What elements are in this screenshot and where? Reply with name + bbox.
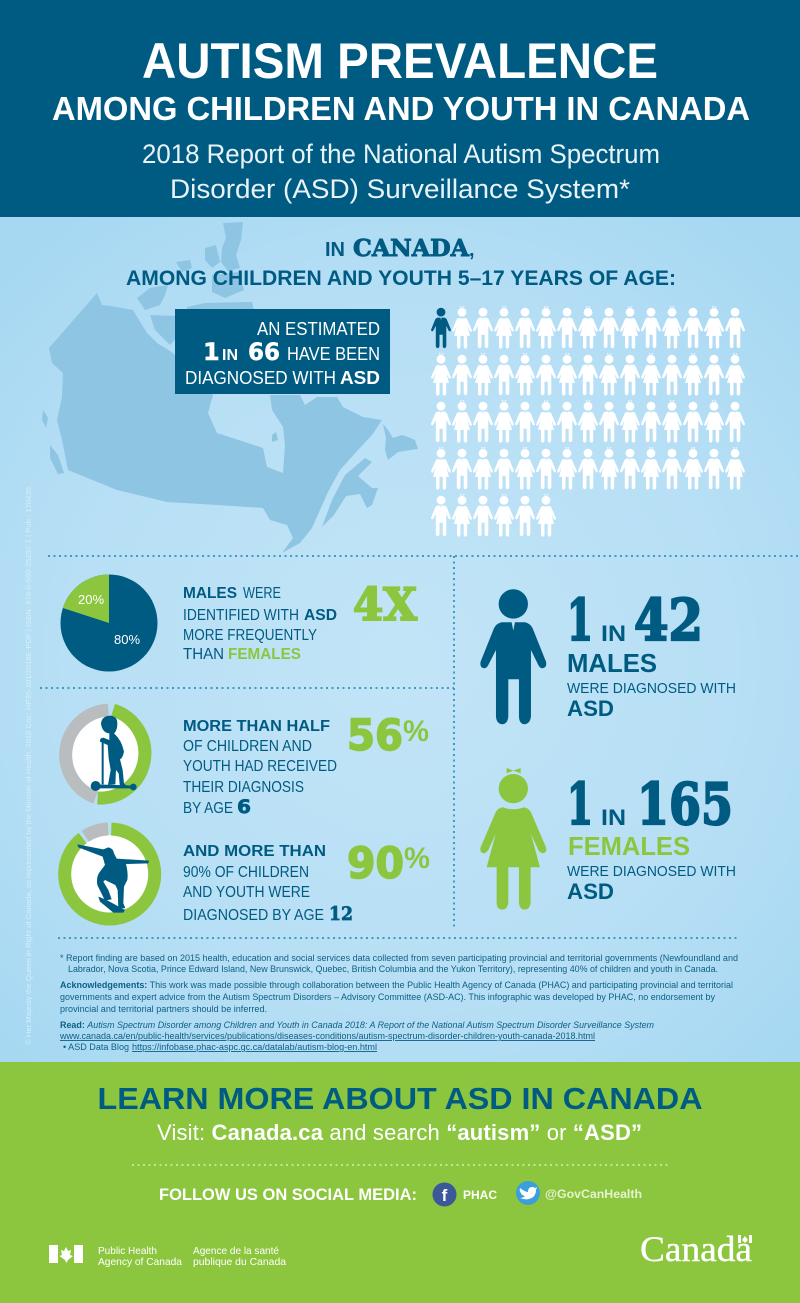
PHAC label: PHAC [463, 1188, 497, 1202]
twitter handle: @GovCanHealth [545, 1189, 642, 1201]
stat: 1 in 165 females: FEMALES [568, 831, 690, 861]
report line 2: Disorder (ASD) Surveillance System* [170, 174, 630, 204]
pie chart: 80% / 20%: 20% [78, 592, 104, 607]
heading line 2: AMONG CHILDREN AND YOUTH 5–17 YEARS OF AGE: [126, 267, 676, 290]
footnotes: Read: Autism Spectrum Disorder among Children and Youth in Canada 2018: A Report of the National Autism Spectrum Disorder Surveillance System [60, 1020, 654, 1030]
stat: 1 in 42 males: 1 [567, 587, 593, 654]
stat: 1 in 165 females: ASD [567, 879, 614, 904]
heading: in Canada: IN [325, 239, 345, 261]
header band [0, 0, 800, 217]
text: males identified 4x: WERE [243, 585, 281, 602]
donut: 56% with scooter child [66, 710, 150, 798]
footnotes [59, 953, 738, 1052]
footnotes: • ASD Data Blog [63, 1042, 129, 1052]
donut: 90% with skateboarder [65, 829, 155, 919]
stat: 1 in 42 males [567, 587, 736, 721]
text: males identified 4x: MALES [183, 585, 237, 602]
callout: 1 in 66: AN ESTIMATED [257, 319, 380, 339]
footnotes: https://infobase.phac-aspc.gc.ca/datalab/autism-blog-en.html [132, 1042, 377, 1052]
title: AUTISM PREVALENCE [142, 33, 658, 89]
icon: facebook [432, 1182, 456, 1206]
icon: male figure [480, 589, 546, 724]
callout: 1 in 66 [175, 309, 390, 394]
icon: female figure [480, 768, 546, 910]
text: more than 90%: 12 [329, 903, 353, 925]
icon: skateboarder [77, 844, 149, 913]
icon: twitter [516, 1181, 540, 1205]
callout: 1 in 66: ASD [340, 368, 380, 388]
text: more than 90%: AND MORE THAN [183, 843, 326, 860]
subtitle: AMONG CHILDREN AND YOUTH IN CANADA [52, 90, 750, 127]
callout: 1 in 66: 66 [248, 338, 280, 366]
callout: 1 in 66: IN [222, 347, 238, 364]
stat: 1 in 42 males: IN [601, 621, 626, 646]
stat: 1 in 165 females: WERE DIAGNOSED WITH [567, 863, 736, 880]
text: males identified 4x [183, 585, 337, 663]
stat: 90%: 90 [347, 839, 404, 889]
icon: facebook: f [442, 1186, 448, 1205]
text: more than half: YOUTH HAD RECEIVED [183, 758, 337, 775]
footnotes: provincial and territorial partners should be inferred. [60, 1004, 267, 1014]
text: males identified 4x: IDENTIFIED WITH [183, 607, 299, 624]
heading: in Canada [126, 235, 676, 290]
vertical copyright: © Her Majesty the Queen in Right of Canada, as represented by the Minister of Health, 2018 Cat.: HP35-101/2018E-PDF | ISBN: 978-0-660-25297-1 | Pub.: 170435 [24, 487, 33, 1045]
footnotes: www.canada.ca/en/public-health/services/publications/diseases-conditions/autism-spectrum-disorder-children-youth-canada-2018.html [59, 1031, 595, 1041]
stat: 1 in 165 females: 1 [567, 771, 593, 838]
footnotes: governments and expert advice from the Autism Spectrum Disorders – Advisory Committee (ASD-AC). This infographic was developed by PHAC, no endorsement by [60, 992, 715, 1002]
text: more than half: OF CHILDREN AND [183, 738, 312, 755]
text: more than 90%: 90% OF CHILDREN [183, 864, 309, 881]
map of Canada [42, 222, 418, 553]
footnotes: * Report finding are based on 2015 health, education and social services data collected from seven participating provincial and territorial governments (Newfoundland and [60, 953, 738, 963]
footer heading: LEARN MORE ABOUT ASD IN CANADA [98, 1081, 703, 1116]
text: more than half: 6 [237, 796, 251, 818]
footer panel [0, 1062, 800, 1303]
social label: FOLLOW US ON SOCIAL MEDIA: [159, 1185, 417, 1204]
stat: 1 in 42 males: WERE DIAGNOSED WITH [567, 680, 736, 697]
logo: Public Health Agency of Canada: Agence de la santé [193, 1245, 279, 1257]
logo: Public Health Agency of Canada [49, 1245, 286, 1268]
report line 1: 2018 Report of the National Autism Spectrum [142, 139, 660, 169]
stat: 56%: 56 [347, 711, 403, 761]
stat: 1 in 165 females: 165 [637, 771, 733, 838]
callout: 1 in 66: 1 [203, 338, 220, 366]
icon: child on scooter [91, 716, 137, 791]
text: more than 90%: AND YOUTH WERE [183, 884, 310, 901]
stat: 1 in 42 males: 42 [634, 587, 703, 654]
text: more than half: THEIR DIAGNOSIS [183, 779, 304, 796]
stat: 90%: % [404, 842, 430, 875]
stat: 56%: % [403, 715, 429, 748]
text: males identified 4x: FEMALES [228, 646, 301, 663]
text: more than half: MORE THAN HALF [183, 718, 330, 735]
logo: Public Health Agency of Canada: Agency of Canada [98, 1256, 182, 1268]
callout: 1 in 66: DIAGNOSED WITH [185, 368, 336, 388]
text: more than 90%: DIAGNOSED BY AGE [183, 907, 324, 924]
footnotes: Labrador, Nova Scotia, Prince Edward Island, New Brunswick, Quebec, British Columbia and the Yukon Territory), representing 40% of children and youth in Canada. [68, 964, 718, 974]
logo: Canada wordmark: Canada [640, 1229, 752, 1269]
heading: in Canada: CANADA [353, 235, 470, 262]
callout: 1 in 66: HAVE BEEN [287, 344, 380, 364]
text: more than half: BY AGE [183, 800, 233, 817]
text: males identified 4x: ASD [304, 607, 337, 624]
pictogram: 1 in 66 figures [431, 306, 745, 537]
text: more than half [183, 718, 337, 818]
text: males identified 4x: MORE FREQUENTLY [183, 627, 317, 644]
logo: Public Health Agency of Canada: Public Health [98, 1245, 157, 1257]
stat: 1 in 165 females [567, 771, 736, 904]
text: more than 90% [183, 843, 353, 925]
text: males identified 4x: THAN [183, 646, 224, 663]
stat: 1 in 165 females: IN [601, 805, 626, 830]
heading: in Canada: , [469, 239, 475, 261]
stat: 4X: 4X [353, 578, 417, 631]
pie chart: 80% / 20% [60, 574, 158, 672]
page background [0, 217, 800, 1063]
stat: 1 in 42 males: ASD [567, 696, 614, 721]
pie chart: 80% / 20%: 80% [114, 632, 140, 647]
stat: 1 in 42 males: MALES [567, 648, 657, 678]
logo: Public Health Agency of Canada: publique du Canada [193, 1256, 286, 1268]
visit line: Visit: Canada.ca and search “autism” or “ASD” [157, 1120, 642, 1145]
footnotes: Acknowledgements: This work was made possible through collaboration between the Public Health Agency of Canada (PHAC) and participating provincial and territorial [60, 980, 733, 990]
